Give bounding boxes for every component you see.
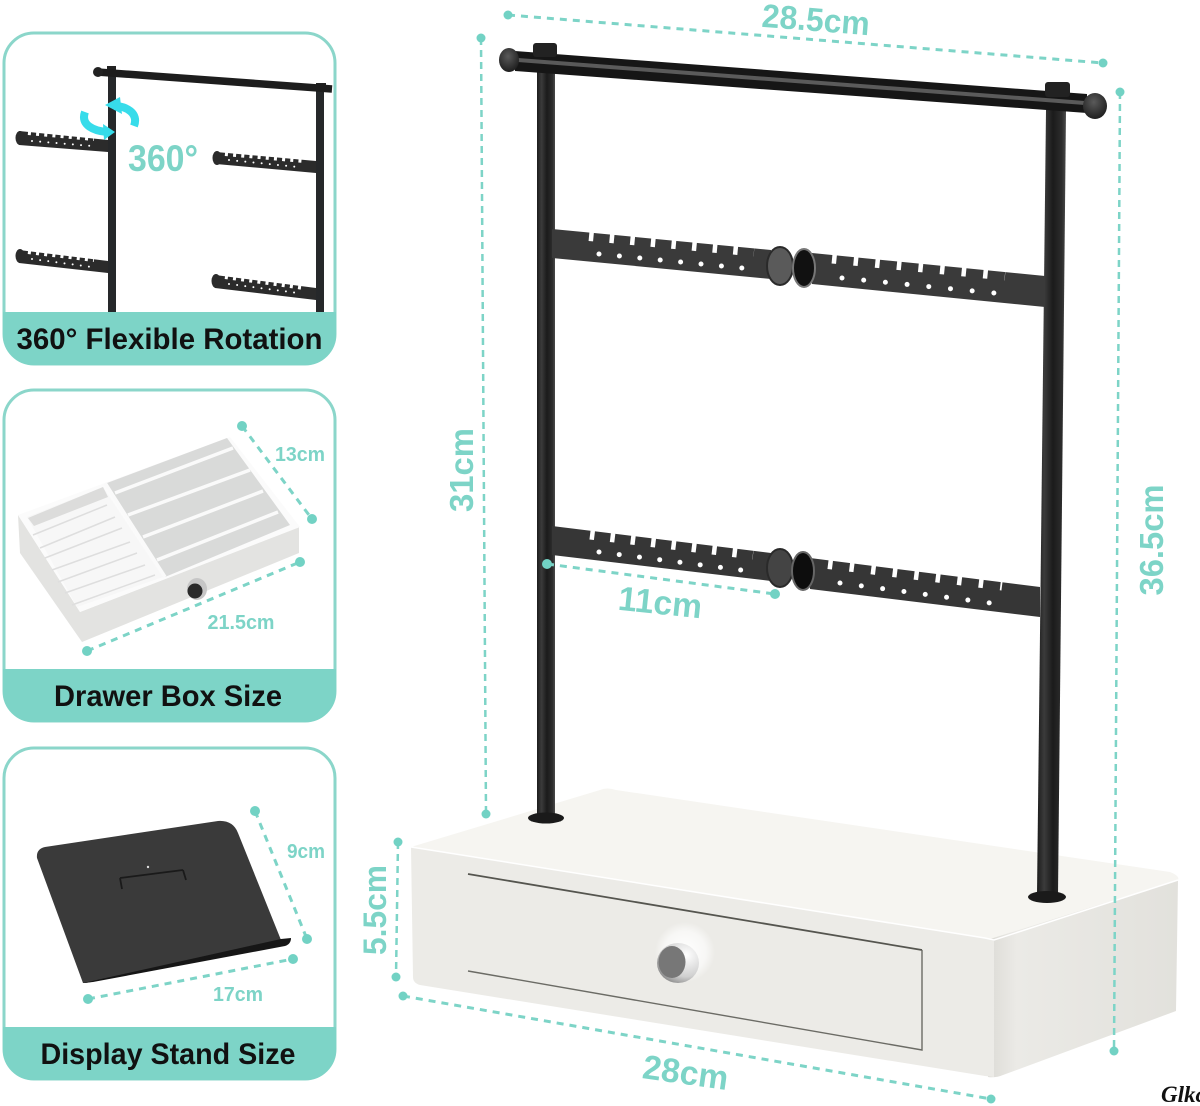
hinge discs (767, 247, 793, 285)
caption text: 360° Flexible Rotation (16, 323, 322, 356)
dimension: 13cm (237, 421, 325, 524)
caption text: Display Stand Size (40, 1038, 296, 1071)
caption band (3, 312, 336, 365)
bar end caps (499, 48, 519, 72)
post collars (528, 812, 564, 824)
left post (537, 70, 555, 815)
dimension: 17cm (83, 954, 298, 1006)
base top face (411, 788, 1178, 939)
dimension: 31cm height: 31cm (443, 428, 480, 512)
dimension: 11cm rack (542, 559, 780, 626)
dimension: 21.5cm (82, 557, 305, 656)
mini stand frame (93, 66, 332, 312)
mini rack arms (16, 131, 316, 300)
icon: rotation arrows (84, 97, 135, 140)
dimension: 5.5cm base height (357, 838, 402, 982)
dimension: 36.5cm height: 36.5cm (1133, 484, 1170, 596)
base front face (411, 847, 994, 1077)
dimension: 9cm: 9cm (287, 841, 325, 863)
dimension: 36.5cm height (1110, 88, 1170, 1056)
notches (590, 535, 1002, 603)
drawer tray illustration (18, 437, 300, 642)
label: 360 degrees: 360° (128, 138, 198, 179)
dimension: 5.5cm base height: 5.5cm (357, 865, 393, 955)
dimension: 28cm base width: 28cm (640, 1048, 731, 1098)
lower rack (552, 526, 1040, 617)
top bar (515, 51, 1087, 113)
caption band (3, 1027, 336, 1080)
dimension: 13cm: 13cm (275, 444, 325, 466)
stand frame (499, 43, 1107, 903)
drawer front outline (468, 874, 922, 950)
hinge discs (767, 549, 793, 587)
panel: 360 flexible rotation (3, 33, 336, 365)
long compartments (107, 438, 290, 577)
caption band (3, 669, 336, 722)
base with drawer (411, 788, 1178, 1077)
drawer knob (655, 922, 715, 983)
drawer knob (187, 578, 207, 600)
dimension: 9cm (250, 806, 325, 944)
upper rack (552, 229, 1045, 307)
dimension: 11cm rack: 11cm (616, 580, 704, 626)
right post (1037, 110, 1066, 895)
dimension: 17cm: 17cm (213, 984, 263, 1006)
dimension: 31cm height (443, 34, 490, 818)
dimension: 21.5cm: 21.5cm (208, 612, 274, 634)
notches (589, 236, 1005, 293)
ring roll section (27, 487, 163, 607)
caption text: Drawer Box Size (54, 680, 282, 713)
panel: drawer box size (3, 390, 336, 722)
dimension: 28.5cm width (504, 0, 1108, 67)
display stand plate (37, 821, 291, 983)
panel: display stand size (3, 748, 336, 1080)
bar knobs (533, 43, 557, 57)
base side face (988, 880, 1178, 1077)
dimension: 28cm base width (398, 992, 996, 1104)
